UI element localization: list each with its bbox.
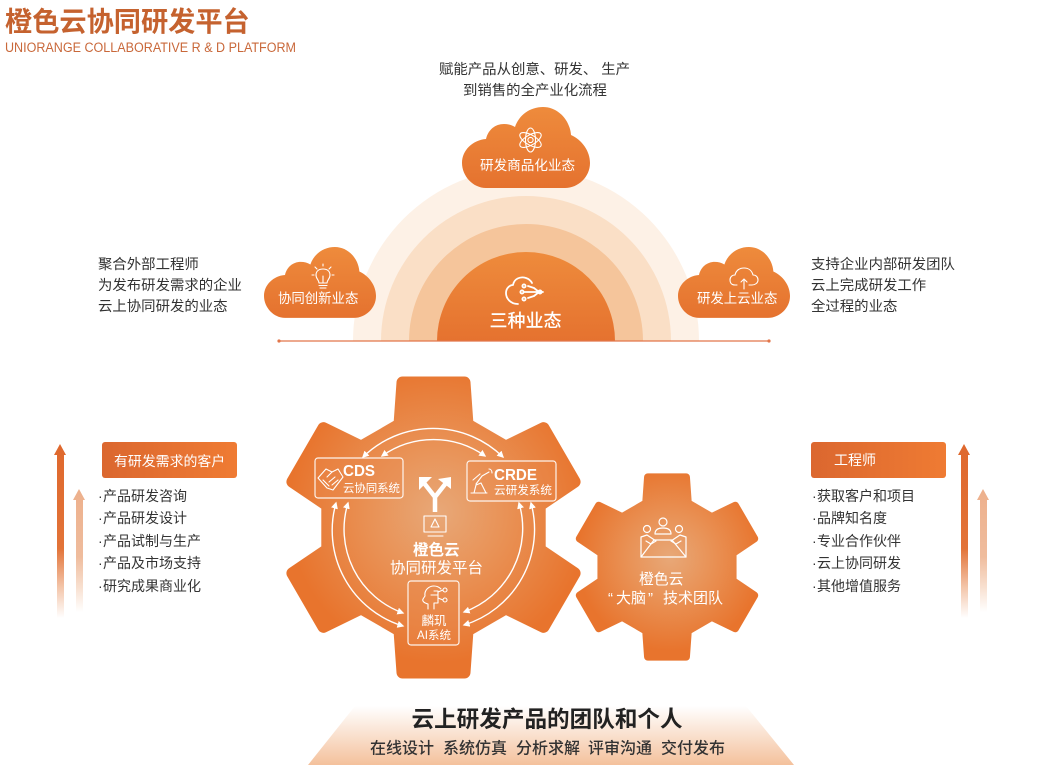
list: client services: · <box>98 533 103 549</box>
arrows: right rising <box>958 444 989 618</box>
icon: atom <box>518 128 543 152</box>
list: engineer benefits: · <box>812 555 817 571</box>
list: client services: 研究成果商业化 <box>103 578 201 594</box>
text block: cloud migration description <box>811 255 955 315</box>
base: cloud product teams: 分析求解 <box>516 740 580 758</box>
icon: AI head <box>423 586 447 609</box>
gear: technical team <box>580 477 754 657</box>
heading: engineers <box>811 442 946 478</box>
cloud: R&D to cloud: 研发上云业态 <box>697 291 777 306</box>
box: CRDE <box>467 461 556 501</box>
icon: cloud network <box>506 277 543 304</box>
heading: engineers: 工程师 <box>834 452 876 468</box>
icon: handshake <box>318 469 343 490</box>
list: engineer benefits: · <box>812 510 817 526</box>
gear center label <box>390 540 483 577</box>
list: client services: 产品研发咨询 <box>103 488 187 504</box>
gear center label: 协同研发平台 <box>390 559 483 577</box>
box: CRDE: CRDE <box>494 467 537 484</box>
base: cloud product teams: 在线设计 <box>370 740 434 758</box>
text block: collaborative innovation description: 聚合外部工程师 <box>98 256 199 273</box>
panel: engineers <box>811 442 946 594</box>
box: AI system: AI系统 <box>417 629 452 642</box>
list: client services: 产品及市场支持 <box>103 555 201 571</box>
base: cloud product teams: 评审沟通 <box>588 738 652 758</box>
list: engineer benefits: · <box>812 578 817 594</box>
gear center label: 橙色云 <box>413 540 460 559</box>
gear: technical team: “ <box>608 590 613 607</box>
text block: collaborative innovation description: 云上协同研发的业态 <box>98 298 228 315</box>
text block: cloud migration description: 全过程的业态 <box>811 297 897 315</box>
arrows: system links <box>332 428 535 626</box>
list: client services <box>98 488 201 594</box>
list: client services: · <box>98 510 103 526</box>
gear: collaborative platform <box>292 382 575 672</box>
box: AI system <box>408 581 459 645</box>
gear: technical team: ” <box>648 590 653 607</box>
list: client services: 产品试制与生产 <box>103 533 201 549</box>
semicircle diagram: three business forms: 三种业态 <box>490 311 562 331</box>
text block: cloud migration description: 云上完成研发工作 <box>811 277 926 294</box>
icon: monitor <box>424 516 446 536</box>
gear: technical team: 橙色云 <box>639 571 683 588</box>
text block: commercialization description <box>439 60 630 99</box>
icon: cloud upload <box>730 268 758 289</box>
list: client services: · <box>98 555 103 571</box>
cloud: collaborative innovation: 协同创新业态 <box>278 291 358 306</box>
text block: collaborative innovation description: 为发布研发需求的企业 <box>98 276 242 294</box>
cloud: R&D to cloud <box>678 247 790 318</box>
base: cloud product teams: 云上研发产品的团队和个人 <box>412 707 683 732</box>
list: engineer benefits: · <box>812 488 817 504</box>
heading: clients <box>102 442 237 478</box>
base: cloud product teams <box>308 706 794 765</box>
list: client services: · <box>98 488 103 504</box>
list: engineer benefits: 品牌知名度 <box>817 510 887 526</box>
gear: technical team: 大脑 <box>616 590 646 607</box>
list: engineer benefits: 云上协同研发 <box>817 555 901 571</box>
arrows: left rising <box>54 444 85 618</box>
title: UNIORANGE COLLABORATIVE R & D PLATFORM <box>5 40 296 55</box>
box: CDS <box>315 458 403 498</box>
list: engineer benefits <box>812 488 915 594</box>
box: CDS: CDS <box>343 463 375 480</box>
icon: light bulb <box>312 264 334 288</box>
title <box>5 6 296 55</box>
text block: cloud migration description: 支持企业内部研发团队 <box>811 255 955 273</box>
list: engineer benefits: 获取客户和项目 <box>817 488 915 504</box>
cloud: R&D commercialization <box>462 107 590 188</box>
icon: robot arm <box>471 469 492 493</box>
box: CRDE: 云研发系统 <box>494 483 552 497</box>
text block: collaborative innovation description <box>98 256 242 315</box>
semicircle diagram: three business forms <box>277 168 771 343</box>
base: cloud product teams: 系统仿真 <box>443 740 507 758</box>
heading: clients: 有研发需求的客户 <box>114 453 225 469</box>
icon: meeting table <box>641 518 686 557</box>
text block: commercialization description: 到销售的全产业化流程 <box>463 81 607 99</box>
text block: commercialization description: 赋能产品从创意、研发、 生产 <box>439 60 630 78</box>
list: engineer benefits: 其他增值服务 <box>817 578 901 594</box>
list: client services: 产品研发设计 <box>103 510 187 526</box>
cloud: R&D commercialization: 研发商品化业态 <box>480 158 576 173</box>
cloud: collaborative innovation <box>264 247 376 318</box>
gear: technical team: 技术团队 <box>663 590 723 607</box>
icon: branching arrow <box>419 477 451 512</box>
list: engineer benefits: · <box>812 533 817 549</box>
box: CDS: 云协同系统 <box>343 481 400 495</box>
base: cloud product teams: 交付发布 <box>661 738 725 758</box>
box: AI system: 麟玑 <box>422 613 447 628</box>
title: 橙色云协同研发平台 <box>5 6 250 37</box>
list: client services: · <box>98 578 103 594</box>
panel: clients <box>98 442 237 594</box>
list: engineer benefits: 专业合作伙伴 <box>817 533 901 549</box>
